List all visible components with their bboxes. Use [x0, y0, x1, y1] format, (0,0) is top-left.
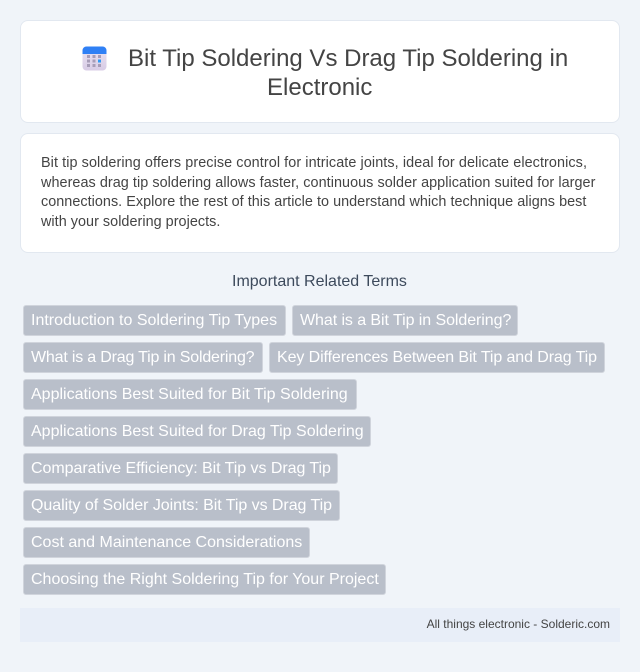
icon: calendar grid [82, 46, 106, 70]
tag: Key Differences Between Bit Tip and Drag Tip [277, 349, 597, 366]
tag: What is a Drag Tip in Soldering? [31, 349, 254, 366]
tag [23, 564, 386, 595]
footer [20, 608, 620, 642]
tag list [23, 305, 605, 595]
intro paragraph card [20, 133, 620, 253]
intro text [41, 155, 596, 230]
tag: Choosing the Right Soldering Tip for Your Project [31, 571, 379, 588]
tag [23, 453, 338, 484]
title card [20, 20, 620, 123]
tag [23, 527, 310, 558]
tag: Applications Best Suited for Bit Tip Soldering [31, 386, 348, 403]
tag [23, 305, 286, 336]
section heading: Important Related Terms [232, 273, 407, 290]
title: Electronic [267, 74, 372, 101]
tag: Cost and Maintenance Considerations [31, 534, 302, 551]
intro text: whereas drag tip soldering allows faster, continuous solder application suited for larger [41, 175, 595, 191]
tag [292, 305, 518, 336]
tag: Applications Best Suited for Drag Tip Soldering [31, 423, 364, 440]
tag [23, 490, 340, 521]
tag: Comparative Efficiency: Bit Tip vs Drag Tip [31, 460, 331, 477]
tag: Quality of Solder Joints: Bit Tip vs Drag Tip [31, 497, 332, 514]
intro text: connections. Explore the rest of this article to understand which technique aligns best [41, 194, 586, 210]
intro text: Bit tip soldering offers precise control for intricate joints, ideal for delicate electronics, [41, 155, 587, 171]
tag [23, 416, 371, 447]
footer text: All things electronic - Solderic.com [427, 617, 610, 631]
tag [269, 342, 605, 373]
tag [23, 379, 357, 410]
title [128, 45, 568, 101]
tag: What is a Bit Tip in Soldering? [300, 312, 511, 329]
intro text: with your soldering projects. [41, 214, 220, 230]
title: Bit Tip Soldering Vs Drag Tip Soldering in [128, 45, 568, 72]
tag: Introduction to Soldering Tip Types [31, 312, 277, 329]
tag [23, 342, 263, 373]
